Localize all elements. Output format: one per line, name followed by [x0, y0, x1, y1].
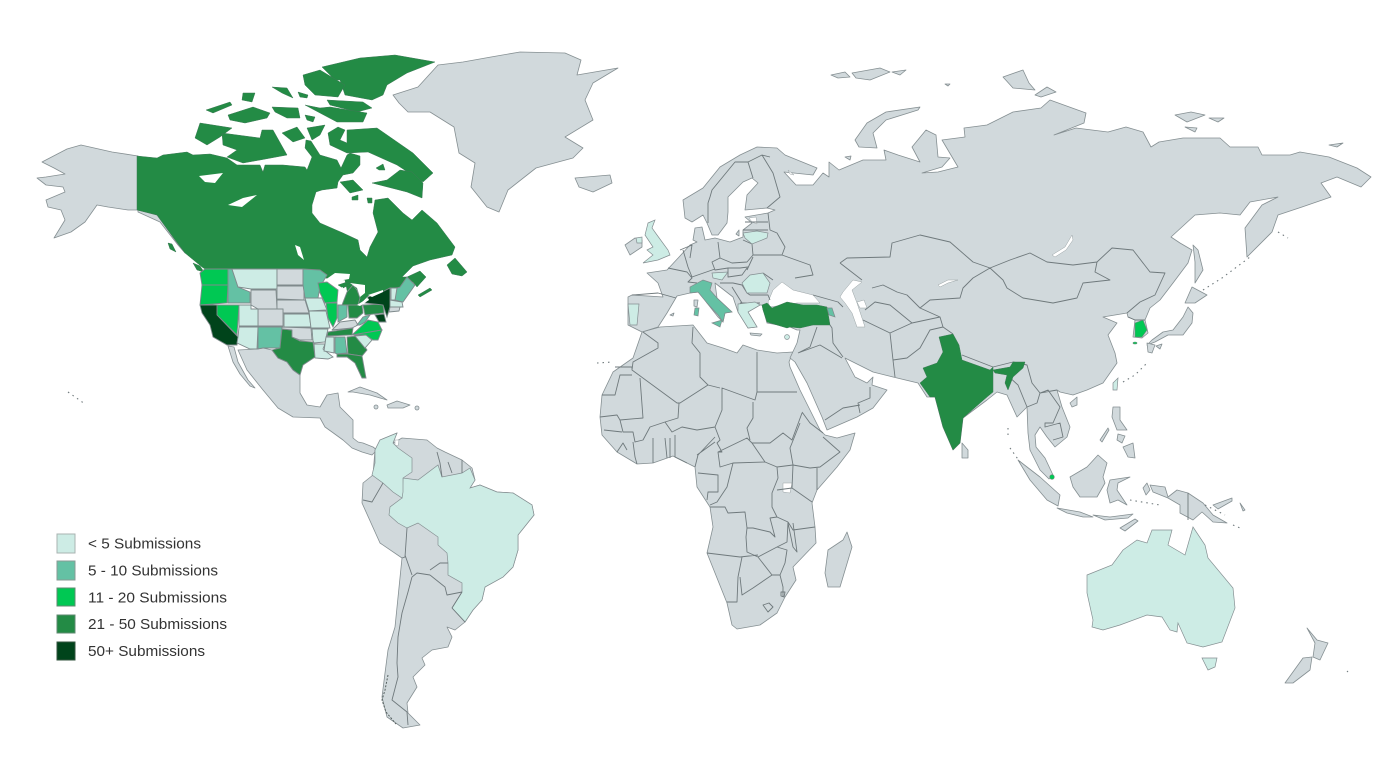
country: Portugal — [628, 304, 639, 325]
landmass: South America — [362, 433, 534, 728]
landmass: Baja California — [228, 346, 255, 388]
landmass: Caribbean islands — [374, 405, 419, 410]
country: Lithuania region — [743, 231, 768, 244]
small island chains — [68, 232, 1348, 672]
country: Taiwan — [1113, 378, 1118, 390]
country: Singapore — [1050, 475, 1054, 479]
country: Canada mainland — [137, 140, 455, 305]
Canadian islands — [168, 55, 467, 297]
country: South Korea — [1133, 320, 1147, 344]
country: Armenia — [827, 308, 835, 317]
country: Northern Ireland — [636, 237, 642, 243]
country: India — [920, 334, 1025, 450]
landmass: Cuba — [348, 387, 387, 400]
state: New York — [365, 288, 390, 317]
Canadian lakes — [199, 173, 304, 260]
state: Washington — [200, 269, 228, 285]
state: Florida — [337, 354, 366, 378]
legend item: fewer than 5 — [57, 534, 201, 553]
country: Colombia — [372, 433, 412, 498]
landmass: New Zealand — [1285, 628, 1328, 683]
legend item: fewer than 5: < 5 Submissions — [88, 536, 201, 552]
inland seas and lakes — [395, 170, 1073, 493]
country borders — [632, 155, 1188, 520]
country: United Kingdom — [643, 220, 670, 263]
landmass: Mexico and Central America — [238, 348, 377, 455]
islands: Japan and Pacific Asia — [962, 245, 1245, 531]
islands: British Isles, Mediterranean and Arctic — [625, 68, 1343, 336]
Great Lakes — [325, 273, 383, 306]
legend item: 21 to 50: 21 - 50 Submissions — [88, 616, 227, 633]
United States states — [200, 269, 415, 378]
landmass: Alaska — [37, 145, 185, 253]
country: Italy — [690, 280, 732, 327]
country: Romania — [742, 273, 770, 293]
country: Australia — [1087, 527, 1235, 670]
country: Austria region — [712, 272, 728, 280]
landmass: Africa — [600, 325, 855, 629]
country: Cyprus — [785, 335, 789, 339]
country: Greece — [738, 302, 760, 328]
landmass: Hispaniola — [387, 401, 410, 408]
landmass: Eurasia — [628, 100, 1371, 479]
legend item: 5 to 10: 5 - 10 Submissions — [88, 562, 218, 580]
country: Turkey — [762, 302, 830, 328]
Chilean fjord islands — [382, 675, 396, 724]
landmass: Madagascar — [825, 532, 852, 587]
state: California — [200, 305, 238, 345]
landmass: Greenland — [393, 52, 618, 212]
African and South American borders — [363, 327, 840, 725]
legend item: 11 to 20: 11 - 20 Submissions — [88, 590, 227, 606]
legend — [57, 534, 227, 660]
legend item: more than 50: 50+ Submissions — [88, 643, 205, 660]
state: Texas — [272, 329, 315, 375]
country: Brazil — [389, 465, 534, 622]
landmass: Iceland — [575, 175, 612, 192]
